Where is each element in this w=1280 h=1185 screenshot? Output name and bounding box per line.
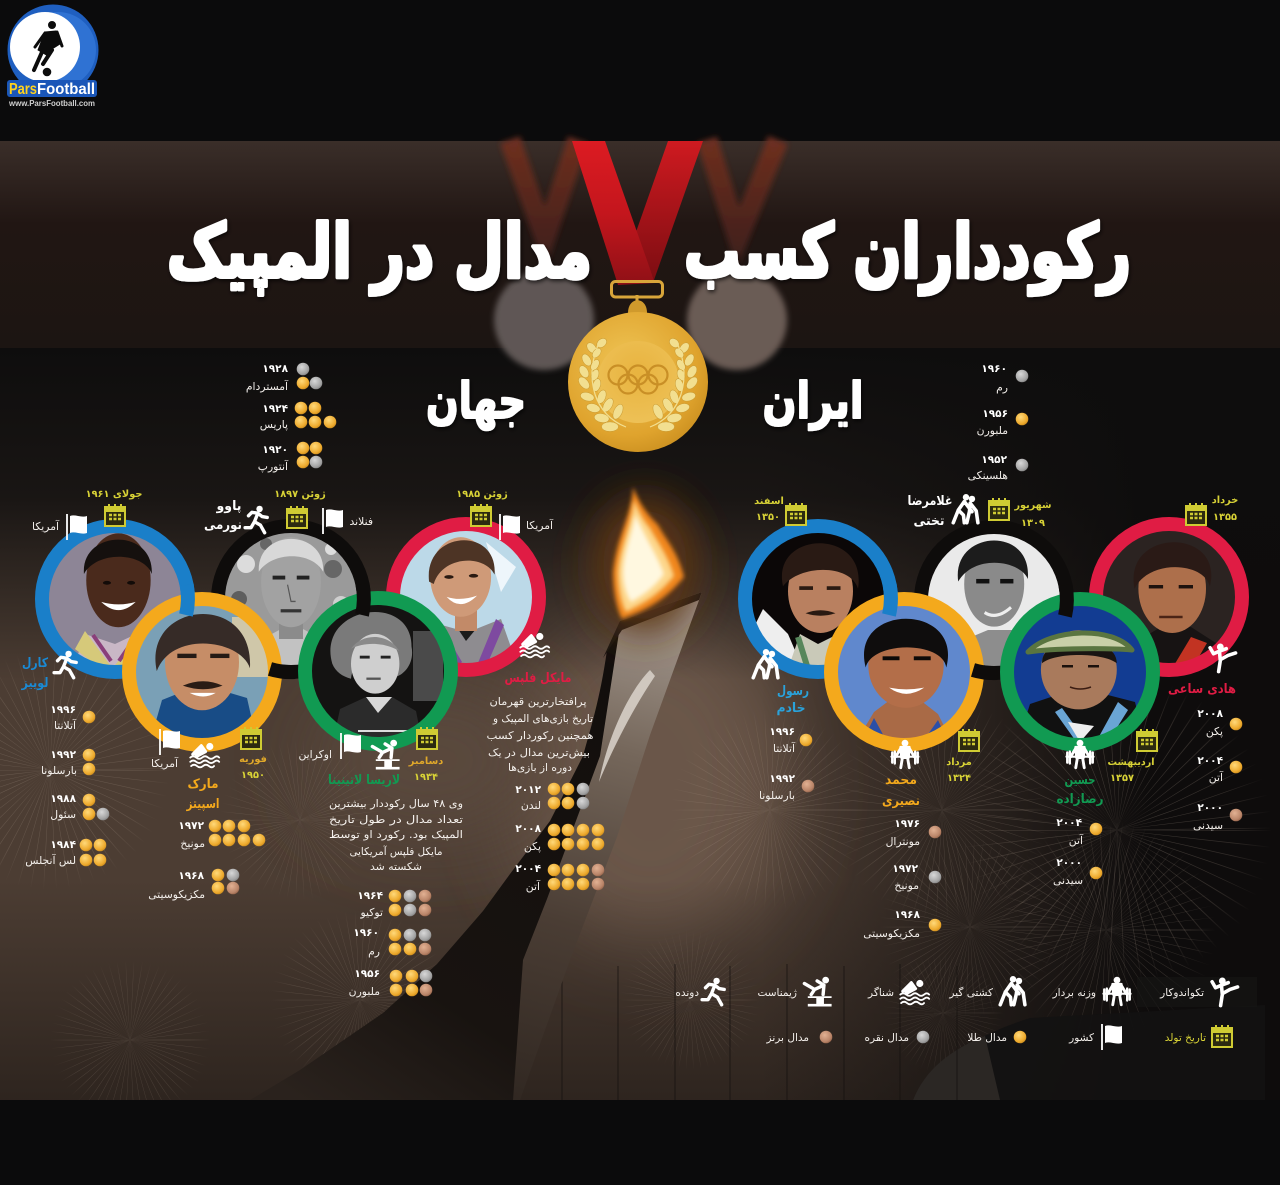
logo: ParsFootball: Pars: [9, 81, 37, 98]
portrait: Mark Spitz: [129, 599, 275, 745]
ring interlocks: [186, 584, 364, 672]
panel: iran athletes rings: [745, 524, 1242, 745]
ring interlocks: [889, 585, 1067, 673]
title: مدال در المپیک: [167, 209, 592, 295]
athlete: Mohammad Nasiri labels: مرداد: [946, 757, 972, 768]
athlete: Mark Spitz labels: ۱۹۶۸: [178, 870, 205, 882]
portrait: Mohammad Nasiri: [831, 599, 977, 745]
legend: مدال نقره: [864, 1032, 909, 1044]
athlete: Paavo Nurmi labels: ۱۹۲۸: [262, 363, 289, 375]
athlete: Carl Lewis labels: سئول: [50, 808, 76, 821]
athlete: Paavo Nurmi labels: آنتورپ: [258, 459, 289, 473]
athlete: Gholamreza Takhti labels: شهریور: [1014, 500, 1052, 511]
athlete: Gholamreza Takhti labels: هلسینکی: [968, 469, 1008, 482]
athlete: Carl Lewis labels: آتلانتا: [54, 718, 77, 732]
athlete: Larisa Latynina labels: [298, 727, 463, 998]
heading: world: جهان: [426, 372, 526, 431]
title: رکودداران کسب: [684, 209, 1131, 296]
athlete: Michael Phelps labels: آمریکا: [526, 518, 554, 532]
athlete: Mark Spitz labels: ۱۹۵۰: [241, 770, 265, 781]
athlete: Hossein Rezazadeh labels: اردیبهشت: [1108, 757, 1154, 768]
portrait: Larisa Latynina: [305, 598, 451, 744]
legend: مدال برنز: [766, 1032, 809, 1044]
athlete: Mohammad Nasiri labels: محمد: [885, 773, 917, 788]
athlete: Larisa Latynina labels: ۱۹۶۴: [357, 890, 384, 902]
athlete: Michael Phelps labels: بیش‌ترین مدال در یک: [488, 747, 590, 759]
flame: [590, 487, 700, 635]
athlete: Larisa Latynina labels: دسامبر: [408, 756, 443, 767]
athlete: Carl Lewis labels: لوییز: [21, 676, 48, 691]
athlete: Carl Lewis labels: ۱۹۸۸: [50, 793, 77, 805]
athlete: Mark Spitz labels: مارک: [188, 777, 218, 792]
athlete: Mohammad Nasiri labels: [863, 729, 979, 940]
athlete: Larisa Latynina labels: ۱۹۶۰: [353, 927, 379, 939]
athlete: Larisa Latynina labels: ۱۹۳۴: [414, 772, 438, 783]
athlete: Mohammad Nasiri labels: مونیخ: [894, 879, 919, 892]
athlete: Michael Phelps labels: آتن: [526, 879, 541, 893]
athlete: Hadi Saei labels: خرداد: [1212, 495, 1238, 506]
athlete: Hadi Saei labels: آتن: [1209, 770, 1224, 784]
legend: تکواندوکار: [1159, 987, 1204, 999]
stadium silhouette: [562, 964, 1265, 1100]
athlete: Michael Phelps labels: دوره از بازی‌ها: [508, 762, 572, 774]
athlete: Michael Phelps labels: پرافتخارترین قهرمان: [490, 696, 587, 708]
athlete: Mark Spitz labels: [148, 727, 267, 901]
athlete: Mohammad Nasiri labels: ۱۹۶۸: [894, 909, 921, 921]
torch tower: [250, 592, 702, 1100]
athlete: Mark Spitz labels: آمریکا: [151, 756, 179, 770]
athlete: Paavo Nurmi labels: فنلاند: [349, 515, 373, 528]
logo: ParsFootball: [7, 4, 98, 108]
athlete: Mohammad Nasiri labels: نصیری: [882, 794, 920, 809]
athlete: Gholamreza Takhti labels: غلامرضا: [908, 494, 952, 509]
athlete: Gholamreza Takhti labels: رم: [996, 381, 1008, 394]
athlete: Mark Spitz labels: فوریه: [239, 754, 267, 765]
athlete: Mohammad Nasiri labels: ۱۹۷۶: [894, 818, 920, 830]
athlete: Larisa Latynina labels: توکیو: [359, 906, 383, 919]
athlete: Gholamreza Takhti labels: ۱۳۰۹: [1021, 518, 1045, 529]
athlete: Larisa Latynina labels: تعداد مدال در طول تاریخ: [329, 814, 463, 826]
athlete: Rasoul Khadem labels: خادم: [776, 701, 806, 716]
athlete: Michael Phelps labels: لندن: [521, 799, 541, 812]
athlete: Larisa Latynina labels: وی ۴۸ سال رکوددار بیشترین: [329, 798, 463, 810]
medal with ribbon: [568, 141, 708, 452]
athlete: Rasoul Khadem labels: بارسلونا: [759, 789, 795, 802]
athlete: Hadi Saei labels: سیدنی: [1193, 819, 1223, 832]
portrait: Rasoul Khadem: [745, 526, 891, 672]
athlete: Paavo Nurmi labels: ۱۹۲۴: [262, 403, 289, 415]
athlete: Hossein Rezazadeh labels: رضازاده: [1056, 792, 1104, 807]
athlete: Gholamreza Takhti labels: ملبورن: [977, 424, 1008, 437]
athlete: Rasoul Khadem labels: آتلانتا: [773, 741, 796, 755]
athlete: Carl Lewis labels: آمریکا: [32, 519, 60, 533]
athlete: Michael Phelps labels: تاریخ بازی‌های المپیک و: [492, 713, 593, 725]
athlete: Hossein Rezazadeh labels: ۲۰۰۴: [1056, 817, 1083, 829]
athlete: Rasoul Khadem labels: ۱۹۹۶: [769, 726, 795, 738]
athlete: Carl Lewis labels: ۱۹۸۴: [50, 839, 77, 851]
athlete: Gholamreza Takhti labels: ۱۹۶۰: [981, 363, 1007, 375]
athlete: Larisa Latynina labels: المپیک بود. رکورد او توسط: [329, 829, 463, 841]
athlete: Paavo Nurmi labels: ۱۹۲۰: [262, 444, 288, 456]
athlete: Mohammad Nasiri labels: ۱۳۲۴: [947, 773, 971, 784]
athlete: Michael Phelps labels: ۲۰۰۴: [515, 863, 542, 875]
athlete: Rasoul Khadem labels: [753, 496, 814, 802]
legend: کشتی گیر: [948, 986, 993, 999]
athlete: Carl Lewis labels: ۱۹۹۲: [50, 749, 77, 761]
athlete: Michael Phelps labels: همچنین رکوردار کسب: [486, 730, 594, 742]
athlete: Hadi Saei labels: ۲۰۰۸: [1197, 708, 1224, 720]
legend: دونده: [675, 987, 699, 999]
athlete: Hadi Saei labels: پکن: [1206, 725, 1223, 738]
blurred background discs and ribbon echoes: [494, 140, 787, 370]
athlete: Michael Phelps labels: پکن: [524, 840, 541, 853]
athlete: Larisa Latynina labels: ملبورن: [349, 985, 380, 998]
athlete: Carl Lewis labels: بارسلونا: [41, 764, 77, 777]
legend: ژیمناست: [757, 987, 797, 999]
athlete: Larisa Latynina labels: ۱۹۵۶: [354, 968, 380, 980]
athlete: Hossein Rezazadeh labels: ۱۳۵۷: [1110, 773, 1134, 784]
athlete: Larisa Latynina labels: مایکل فلپس آمریکایی: [350, 845, 442, 858]
athlete: Carl Lewis labels: کارل: [22, 656, 48, 671]
athlete: Carl Lewis labels: ۱۹۹۶: [50, 704, 76, 716]
legend: وزنه بردار: [1052, 987, 1096, 999]
athlete: Larisa Latynina labels: اوکراین: [298, 748, 332, 761]
legend: مدال طلا: [967, 1032, 1007, 1044]
athlete: Mohammad Nasiri labels: ۱۹۷۲: [892, 863, 919, 875]
athlete: Mark Spitz labels: ۱۹۷۲: [178, 820, 205, 832]
legend: [675, 976, 1238, 1050]
athlete: Michael Phelps labels: ۲۰۰۸: [515, 823, 542, 835]
athlete: Rasoul Khadem labels: ۱۹۹۲: [769, 773, 796, 785]
athlete: Rasoul Khadem labels: اسفند: [754, 496, 784, 507]
athlete: Mark Spitz labels: اسپیتز: [186, 797, 220, 812]
athlete: Mark Spitz labels: مونیخ: [180, 837, 205, 850]
portrait: Hossein Rezazadeh: [1007, 599, 1153, 745]
athlete: Carl Lewis labels: جولای ۱۹۶۱: [86, 489, 142, 500]
athlete: Hadi Saei labels: ۲۰۰۴: [1197, 755, 1224, 767]
athlete: Hadi Saei labels: هادی ساعی: [1168, 682, 1236, 697]
athlete: Paavo Nurmi labels: آمستردام: [246, 379, 289, 393]
heading: iran: ایران: [762, 372, 864, 431]
athlete: Larisa Latynina labels: لاریسا لاتینینا: [328, 773, 400, 788]
athlete: Larisa Latynina labels: شکسته شد: [370, 861, 422, 873]
portrait: Paavo Nurmi: [218, 526, 364, 672]
athlete: Hossein Rezazadeh labels: [1053, 729, 1157, 887]
legend: کشور: [1068, 1032, 1094, 1044]
athlete: Hadi Saei labels: [1168, 495, 1242, 832]
logo: ParsFootball: Football: [37, 81, 95, 98]
athlete: Rasoul Khadem labels: ۱۳۵۰: [756, 512, 780, 523]
athlete: Hossein Rezazadeh labels: ۲۰۰۰: [1056, 857, 1082, 869]
athlete: Michael Phelps labels: ۲۰۱۲: [515, 784, 542, 796]
athlete: Mark Spitz labels: مکزیکوسیتی: [148, 888, 205, 901]
athlete: Michael Phelps labels: ژوئن ۱۹۸۵: [456, 489, 508, 500]
portrait: Michael Phelps: [393, 524, 539, 670]
athlete: Hadi Saei labels: ۲۰۰۰: [1197, 802, 1223, 814]
logo: ParsFootball: www.ParsFootball.com: [8, 99, 95, 108]
athlete: Carl Lewis labels: [21, 489, 142, 867]
athlete: Paavo Nurmi labels: پاوو: [216, 499, 242, 514]
athlete: Gholamreza Takhti labels: ۱۹۵۲: [981, 454, 1008, 466]
athlete: Mohammad Nasiri labels: مکزیکوسیتی: [863, 927, 920, 940]
panel: world athletes rings: [42, 524, 539, 745]
title: [167, 209, 1131, 296]
athlete: Mohammad Nasiri labels: مونترال: [886, 835, 920, 848]
athlete: Hossein Rezazadeh labels: آتن: [1069, 833, 1084, 847]
athlete: Hadi Saei labels: ۱۳۵۵: [1213, 512, 1237, 523]
athlete: Larisa Latynina labels: رم: [368, 945, 380, 958]
legend: شناگر: [867, 986, 894, 999]
athlete: Paavo Nurmi labels: [204, 363, 373, 534]
athlete: Gholamreza Takhti labels: ۱۹۵۶: [982, 408, 1008, 420]
athlete: Michael Phelps labels: مایکل فلپس: [504, 671, 572, 686]
athlete: Paavo Nurmi labels: پاریس: [260, 418, 288, 431]
athlete: Paavo Nurmi labels: نورمی: [204, 518, 242, 533]
athlete: Michael Phelps labels: [456, 489, 604, 893]
legend: تاریخ تولد: [1165, 1032, 1206, 1044]
athlete: Rasoul Khadem labels: رسول: [777, 684, 809, 699]
portrait: Gholamreza Takhti: [921, 527, 1067, 673]
athlete: Gholamreza Takhti labels: [908, 363, 1052, 529]
portrait: Hadi Saei: [1096, 524, 1242, 670]
portrait: Carl Lewis: [42, 526, 188, 672]
athlete: Carl Lewis labels: لس آنجلس: [25, 853, 76, 867]
athlete: Paavo Nurmi labels: ژوئن ۱۸۹۷: [274, 489, 326, 500]
athlete: Gholamreza Takhti labels: تختی: [914, 514, 944, 529]
athlete: Hossein Rezazadeh labels: حسین: [1064, 773, 1096, 788]
athlete: Hossein Rezazadeh labels: سیدنی: [1053, 874, 1083, 887]
